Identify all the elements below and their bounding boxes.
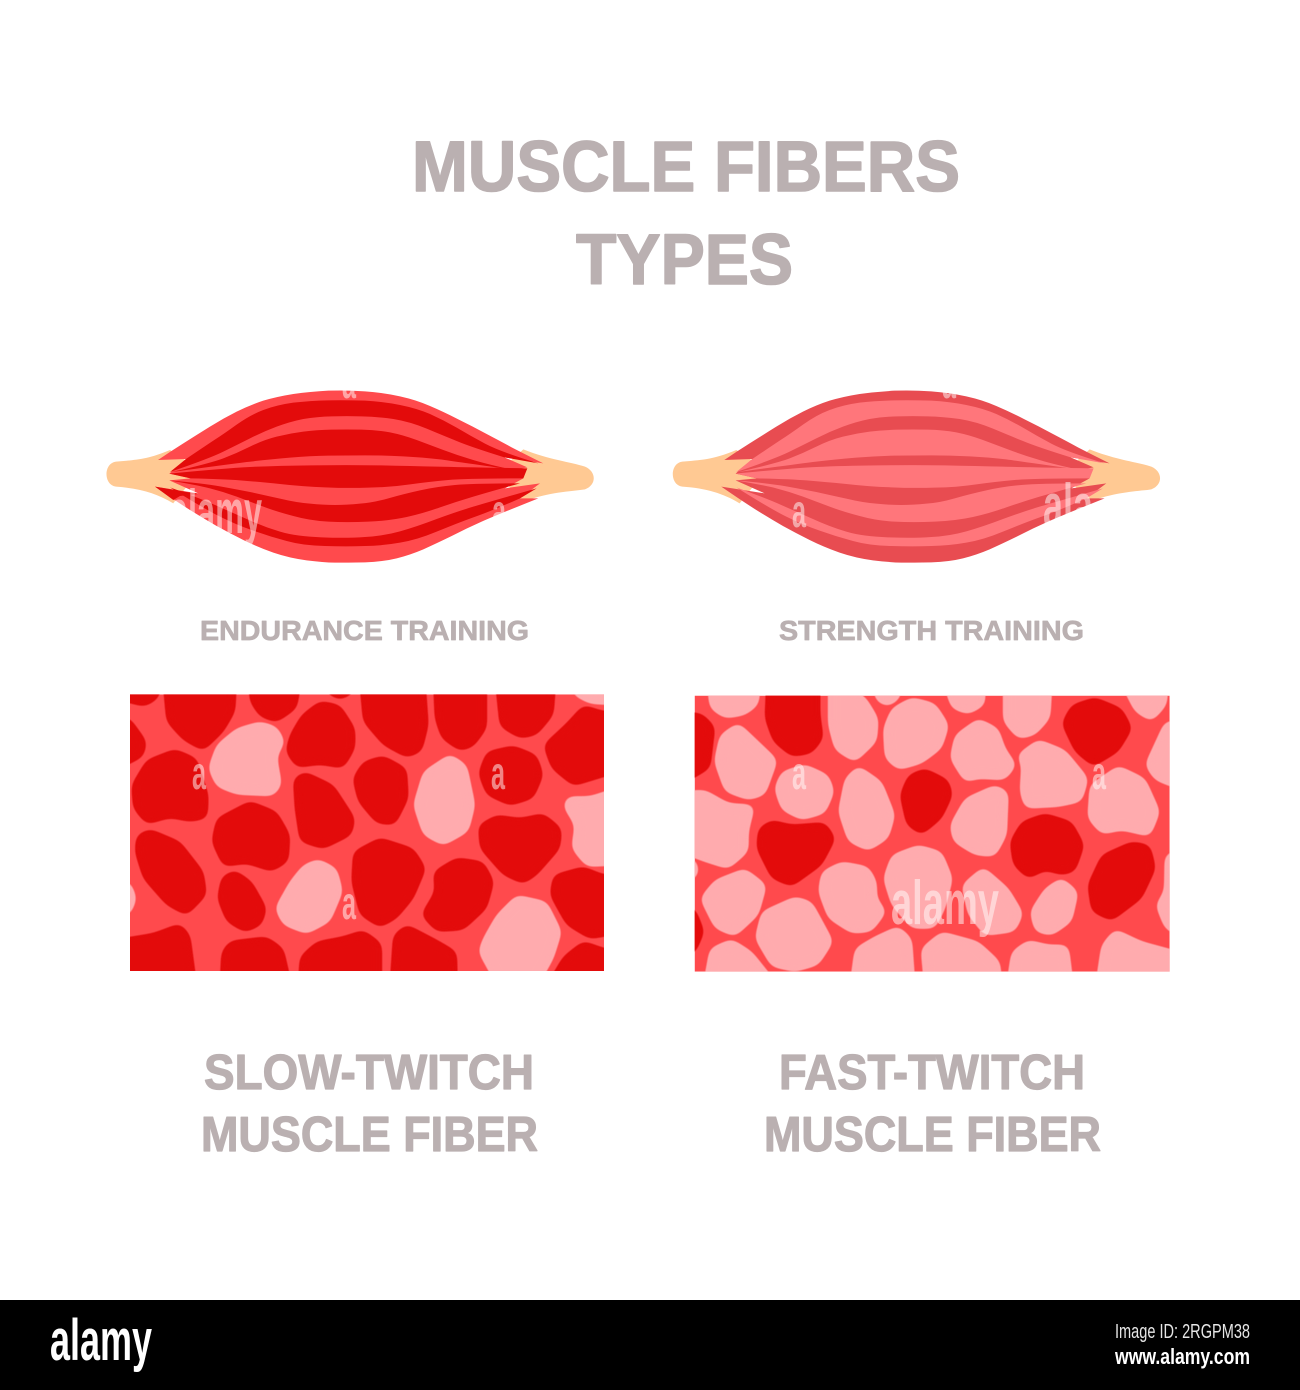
label: strength training: STRENGTH TRAINING (779, 615, 1084, 646)
stock-photo watermarks: a (492, 485, 506, 537)
caption: slow-twitch muscle fiber: MUSCLE FIBER (201, 1108, 538, 1162)
stock-photo watermarks (170, 356, 1106, 938)
stock-photo watermarks: a (342, 356, 356, 408)
stock-photo watermarks: a (942, 356, 956, 408)
caption: slow-twitch muscle fiber: SLOW-TWITCH (204, 1046, 534, 1100)
title: MUSCLE FIBERS (412, 128, 960, 207)
website: www.alamy.com (1114, 1344, 1250, 1369)
caption: fast-twitch muscle fiber: FAST-TWITCH (779, 1046, 1085, 1100)
panel: slow-twitch fiber cross-section (130, 694, 604, 971)
panel: fast-twitch fiber cross-section (694, 696, 1170, 972)
footer bar (0, 1300, 1300, 1390)
stock-photo watermarks: a (342, 877, 356, 929)
title: TYPES (576, 221, 793, 300)
stock-photo watermarks: a (491, 747, 505, 799)
title (412, 128, 960, 300)
image id: Image ID: 2RGPM38 (1115, 1321, 1250, 1343)
stock-photo watermarks: alamy (891, 869, 999, 938)
label: endurance training: ENDURANCE TRAINING (200, 615, 529, 646)
caption: fast-twitch muscle fiber (764, 1046, 1101, 1162)
stock-photo watermarks: ala (1043, 472, 1093, 541)
footer logo: alamy (50, 1308, 152, 1373)
stock-photo watermarks: a (192, 747, 206, 799)
stock-photo watermarks: a (792, 485, 806, 537)
caption: slow-twitch muscle fiber (201, 1046, 538, 1162)
muscle: strength training (673, 390, 1160, 563)
stock-photo watermarks: a (792, 747, 806, 799)
muscle: endurance training (106, 390, 594, 563)
caption: fast-twitch muscle fiber: MUSCLE FIBER (764, 1108, 1101, 1162)
stock-photo watermarks: a (1092, 747, 1106, 799)
stock-photo watermarks: alamy (170, 478, 262, 547)
